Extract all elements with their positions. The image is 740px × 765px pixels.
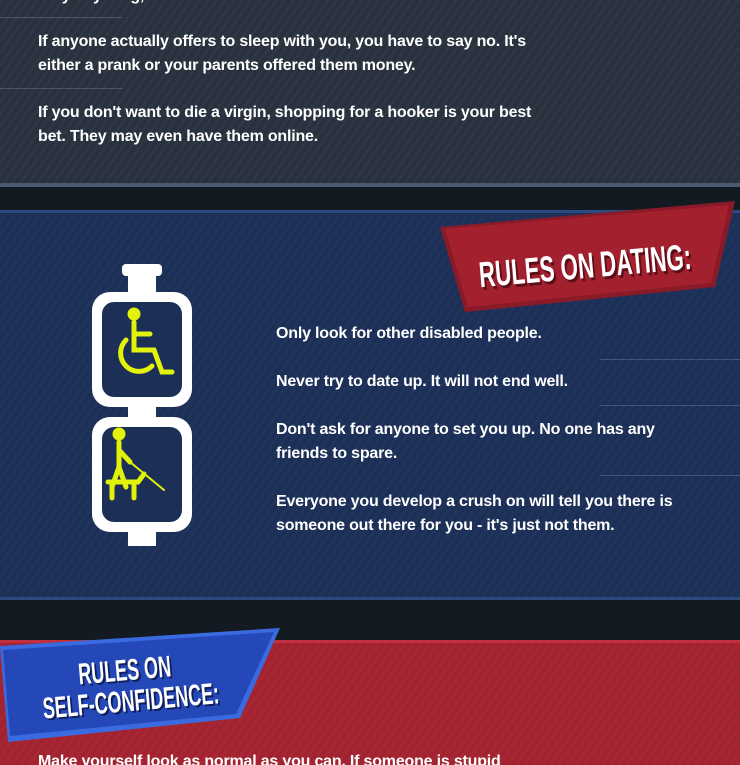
panel: self-confidence (0, 640, 740, 765)
banner: rules on self-confidence: RULES ON (77, 651, 172, 692)
panel: dating (0, 213, 740, 597)
banner: rules on dating: RULES ON DATING: (477, 238, 693, 296)
text: dating rules: Only look for other disabled people. (276, 325, 542, 342)
panel: dating: Don't ask for anyone to set you up. No one has any friends to spare. (276, 421, 655, 462)
text: offer rule: If anyone actually offers to sleep with you, you have to say no. It's either a prank or your parents offered them money. (38, 33, 526, 74)
text: virgin rule: If you don't want to die a virgin, shopping for a hooker is your best bet. They may even have them online. (38, 104, 531, 145)
banner: rules on self-confidence (0, 628, 280, 742)
banner: rules on dating: RULES ON DATING: (480, 240, 695, 298)
banner: rules on self-confidence: SELF-CONFIDENCE: (41, 678, 221, 726)
panel: dating: Everyone you develop a crush on will tell you there is someone out there for you - it's just not them. (276, 493, 672, 534)
panel: top dark (0, 0, 740, 183)
banner: rules on self-confidence: SELF-CONFIDENCE: (43, 680, 222, 728)
panel: dating: Never try to date up. It will not end well. (276, 373, 568, 390)
banner: rules on dating (440, 201, 735, 312)
banner: rules on self-confidence: RULES ON (79, 653, 174, 694)
icon: disability sign post (92, 264, 192, 546)
